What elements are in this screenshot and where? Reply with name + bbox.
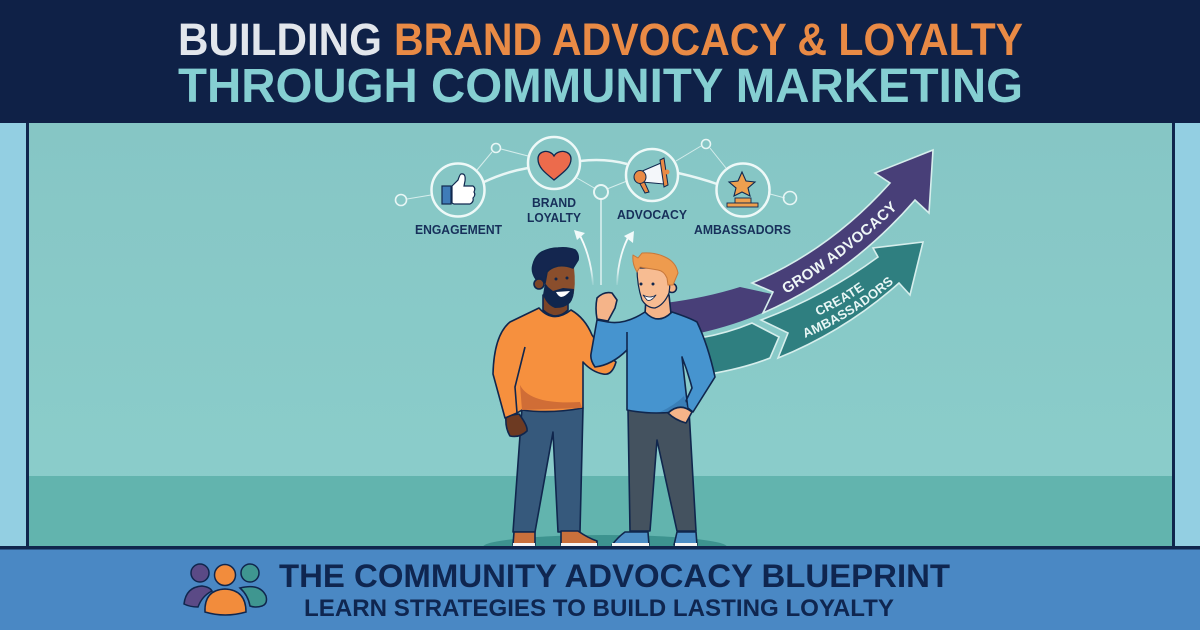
ear [534,279,544,289]
smile [556,291,570,297]
eyes and smile [640,282,642,286]
pants [513,408,583,532]
label: brand loyalty [527,195,581,225]
icon: megaphone [626,149,678,201]
shoes [612,532,649,545]
left side strip [0,123,29,548]
hair [633,253,678,285]
label: brand loyalty: LOYALTY [527,210,581,225]
background wall [0,123,1200,548]
right side strip [1172,123,1200,548]
face [545,265,575,305]
footer heading: THE COMMUNITY ADVOCACY BLUEPRINT [279,558,950,594]
eyes [554,278,558,280]
small network nodes [396,140,796,206]
floor band [28,476,1172,547]
sweater shadow [660,396,688,412]
icon: thumbs up [432,164,484,216]
sweater [493,308,616,418]
icon: star trophy [716,164,770,216]
label: advocacy: ADVOCACY [617,207,687,222]
sweater [591,312,715,413]
ear [668,284,676,292]
person: man in blue sweater [591,253,715,546]
title line 1: BRAND ADVOCACY & LOYALTY [394,14,1023,65]
hand on hip [668,407,692,423]
network connector lines [407,146,785,199]
label: grow advocacy: GROW ADVOCACY [782,200,895,292]
arrow: grow advocacy [670,148,934,332]
label: create ambassadors: CREATE [816,282,864,314]
pants [628,409,696,531]
shoes [513,532,535,545]
hand [506,414,527,436]
title line 1 [178,14,1023,65]
neck [645,295,671,319]
label: ambassadors: AMBASSADORS [694,222,791,237]
sleeve seam [626,332,628,350]
ground shadow [483,535,727,559]
label: engagement: ENGAGEMENT [415,222,502,237]
raised fist [596,293,617,321]
icon: heart [528,137,580,189]
sweater shadow [520,385,582,410]
title line 2: THROUGH COMMUNITY MARKETING [178,60,1023,113]
icon: community people [184,564,266,615]
arrow: create ambassadors [704,241,924,374]
label: brand loyalty: BRAND [532,195,576,210]
face [637,268,670,308]
neck [543,295,568,316]
label: create ambassadors: AMBASSADORS [804,277,892,338]
hair [532,248,578,283]
header band [0,0,1200,123]
arrows rising from the people [574,199,634,285]
footer band [0,546,1200,630]
title line 1: BUILDING [178,14,382,65]
sleeve seam [515,347,525,413]
footer subheading: LEARN STRATEGIES TO BUILD LASTING LOYALTY [304,595,894,622]
beard [543,283,574,308]
person: bearded man in orange sweater [493,248,616,546]
